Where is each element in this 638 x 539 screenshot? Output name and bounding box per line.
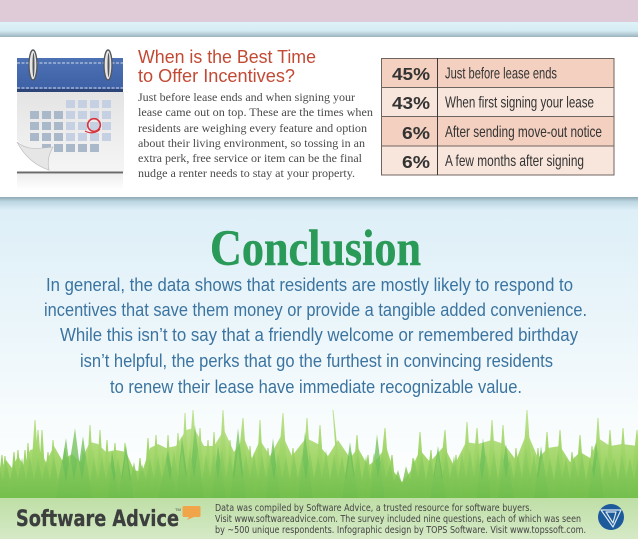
logo: Software Advice: Software Advice <box>16 507 179 532</box>
body text: nudge a renter needs to stay at your property. <box>138 167 355 180</box>
heading: When is the Best Time <box>138 46 316 67</box>
conclusion text: incentives that save them money or provide a tangible added convenience. <box>44 300 587 320</box>
footer band <box>0 498 638 539</box>
conclusion text: In general, the data shows that residents are mostly likely to respond to <box>46 275 573 295</box>
row labels: A few months after signing <box>445 153 584 170</box>
conclusion text <box>44 275 587 397</box>
top pink band <box>0 0 638 22</box>
body text: lease came out on top. These are the times when <box>138 106 373 119</box>
footer credits: Data was compiled by Software Advice, a trusted resource for software buyers. <box>215 503 532 514</box>
body text: Just before lease ends and when signing your <box>138 91 355 104</box>
body text <box>138 91 373 180</box>
panel shadow <box>0 197 638 210</box>
percentages: 6% <box>402 123 430 143</box>
row labels <box>445 66 602 170</box>
heading: conclusion: Conclusion <box>210 221 421 277</box>
panel: best time to offer incentives <box>0 37 638 197</box>
percentages: 43% <box>392 93 430 113</box>
body text: about their living environment, so tossing in an <box>138 137 365 150</box>
table: timing percentages <box>381 58 614 175</box>
icon: speech bubble <box>182 506 200 520</box>
body text: extra perk, free service or item can be the final <box>138 152 363 165</box>
conclusion text: isn’t helpful, the perks that go the furthest in convincing residents <box>80 351 553 371</box>
logo: Software Advice: TM <box>175 507 181 512</box>
heading: to Offer Incentives? <box>138 65 295 86</box>
footer credits: by ~500 unique respondents. Infographic design by TOPS Software. Visit www.topssoft.com. <box>215 525 586 536</box>
conclusion text: to renew their lease have immediate recognizable value. <box>110 377 522 397</box>
percentages: 45% <box>392 64 430 84</box>
conclusion text: While this isn’t to say that a friendly welcome or remembered birthday <box>60 325 578 345</box>
footer credits: Visit www.softwareadvice.com. The survey included nine questions, each of which was seen <box>215 514 581 525</box>
logo: TOPS Software <box>598 504 624 530</box>
grass <box>0 410 638 509</box>
heading <box>138 46 316 86</box>
icon: calendar <box>17 50 124 190</box>
footer credits <box>215 503 586 536</box>
sky background <box>0 197 638 499</box>
percentages: 6% <box>402 152 430 172</box>
body text: residents are weighing every feature and option <box>138 122 367 135</box>
top blue band <box>0 22 638 38</box>
percentages <box>392 64 430 172</box>
row labels: Just before lease ends <box>445 66 557 82</box>
